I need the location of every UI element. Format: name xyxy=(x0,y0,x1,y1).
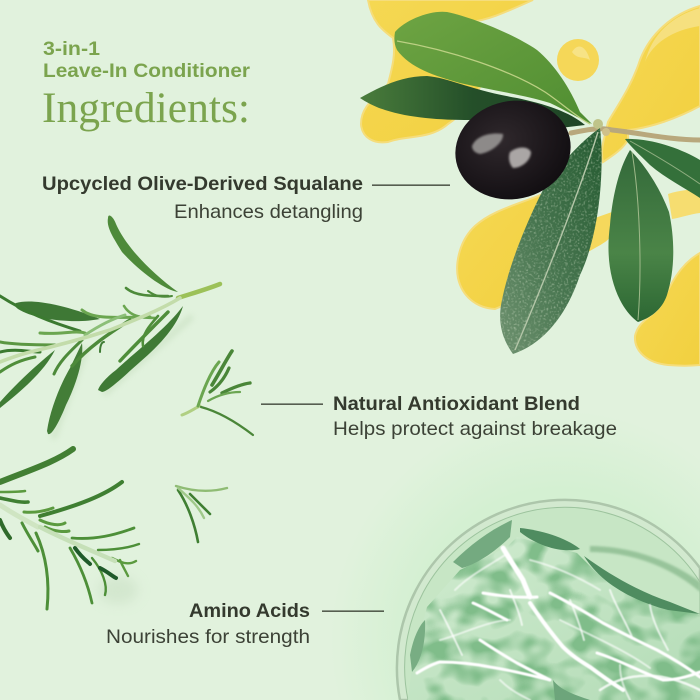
rosemary sprig: lower xyxy=(0,449,139,609)
callout: antioxidant: Helps protect against breakage xyxy=(333,418,617,440)
title xyxy=(42,38,250,132)
icon: dark back leaf xyxy=(360,76,585,128)
callout: antioxidant xyxy=(261,393,617,440)
title: Leave-In Conditioner xyxy=(43,60,250,82)
oil splash xyxy=(361,0,700,366)
rosemary sprig: large xyxy=(0,216,220,436)
icon: frosted bottom leaf xyxy=(500,128,602,354)
dish shadow band xyxy=(590,546,700,592)
thin needles xyxy=(126,288,168,296)
gel dish xyxy=(397,500,700,700)
callout: squalane: Upcycled Olive-Derived Squalane xyxy=(42,173,363,195)
callout: amino acids xyxy=(106,600,384,648)
icon: top green leaf xyxy=(394,12,592,124)
wide needles xyxy=(108,216,178,292)
callout: amino acids: Nourishes for strength xyxy=(106,626,310,648)
title: Ingredients: xyxy=(42,85,250,132)
icon: branch stem xyxy=(571,119,700,140)
icon: olive xyxy=(446,90,580,210)
gel caustics xyxy=(400,530,700,700)
callout: amino acids: Amino Acids xyxy=(189,600,310,622)
title: 3-in-1 xyxy=(43,38,100,60)
dark gel folds xyxy=(453,520,512,568)
olive branch xyxy=(360,12,700,354)
callout: antioxidant: Natural Antioxidant Blend xyxy=(333,393,580,415)
stem xyxy=(178,284,220,298)
callout: squalane xyxy=(42,173,450,223)
gel body xyxy=(408,615,700,700)
icon: right leaf xyxy=(625,139,700,198)
icon: middle leaf xyxy=(608,150,673,322)
rosemary sprig: small xyxy=(182,351,253,435)
callout: squalane: Enhances detangling xyxy=(174,201,363,223)
rosemary sprig: tiny xyxy=(176,486,227,542)
gel highlights xyxy=(417,548,700,700)
